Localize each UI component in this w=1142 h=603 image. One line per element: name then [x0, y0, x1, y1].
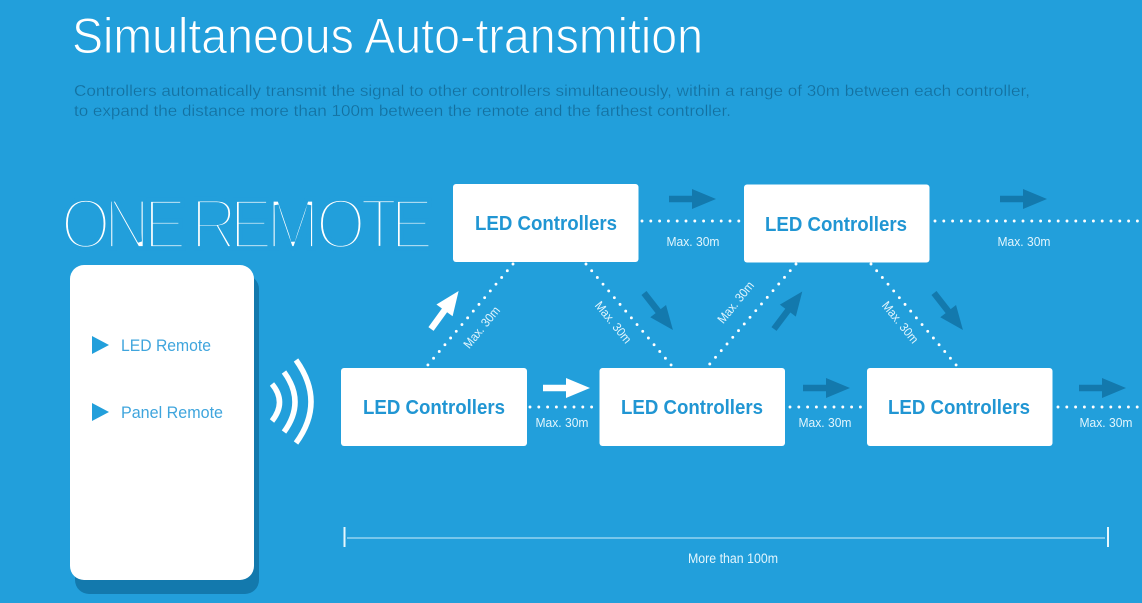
description text: [74, 83, 1030, 120]
remote option: LED Remote: LED Remote: [121, 336, 211, 355]
distance labels: Max. 30m: [715, 279, 757, 326]
controller: top right: LED Controllers: [765, 214, 907, 236]
dotted connection lines: [427, 221, 1142, 407]
arrow: dark diagonal down first: [636, 287, 681, 336]
distance labels: Max. 30m: [666, 235, 720, 249]
distance labels: Max. 30m: [536, 416, 588, 430]
range label: More than 100m: [688, 551, 778, 566]
arrow: dark diagonal down second: [926, 287, 971, 336]
controller: bottom left: LED Controllers: [363, 397, 505, 419]
controller: top left: LED Controllers: [475, 213, 617, 235]
range measure line: [344, 527, 1108, 566]
arrow: dark top second: [1000, 189, 1047, 209]
arrow: dark bottom second: [1079, 378, 1126, 398]
icon: wireless signal: [272, 360, 311, 443]
distance labels: Max. 30m: [1080, 416, 1132, 430]
description text: to expand the distance more than 100m between the remote and the farthest controller.: [74, 103, 731, 120]
distance labels: Max. 30m: [461, 304, 503, 351]
controller: top right: [744, 184, 930, 262]
arrow: white diagonal: [423, 285, 467, 335]
controller: top left: [453, 184, 638, 262]
controller: bottom middle: LED Controllers: [621, 397, 763, 419]
arrow: dark top first: [669, 189, 716, 209]
controller: bottom left: [341, 368, 527, 446]
controller: bottom right: LED Controllers: [888, 397, 1030, 419]
distance labels: Max. 30m: [879, 299, 921, 346]
distance labels: Max. 30m: [998, 235, 1050, 249]
distance labels: Max. 30m: [592, 299, 634, 346]
arrow: dark diagonal up: [766, 285, 810, 335]
remote option: Panel Remote: Panel Remote: [121, 403, 223, 422]
controller: bottom middle: [600, 368, 785, 446]
description text: Controllers automatically transmit the signal to other controllers simultaneously, within a range of 30m between each controller,: [74, 83, 1030, 100]
arrow: dark bottom first: [803, 378, 850, 398]
panel: remote card: [70, 265, 259, 594]
controller: bottom right: [867, 368, 1052, 446]
heading: one remote: ONE REMOTE: [61, 185, 433, 264]
title: Simultaneous Auto-transmition: [72, 8, 703, 64]
distance labels: [461, 235, 1132, 430]
distance labels: Max. 30m: [798, 416, 852, 430]
arrow: white horizontal: [543, 378, 590, 398]
